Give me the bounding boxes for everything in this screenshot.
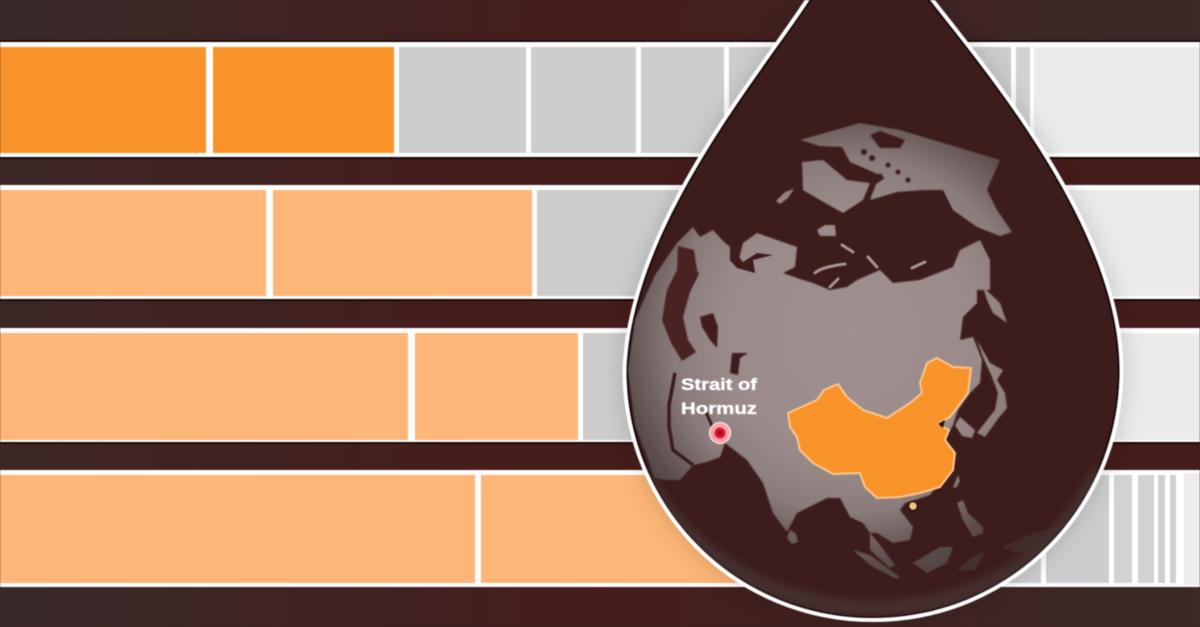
- globe map: [628, 123, 1100, 608]
- land masses: [628, 123, 1060, 579]
- bar row 2: [0, 190, 1200, 296]
- oil drop: [626, 0, 1120, 618]
- bohai sea notch: [938, 420, 945, 428]
- red sea: [669, 373, 693, 465]
- svalbard: [817, 225, 836, 236]
- arctic islands: [815, 245, 925, 287]
- china: [788, 358, 971, 498]
- philippines: [957, 500, 983, 537]
- borneo: [913, 547, 953, 573]
- black sea: [700, 313, 718, 348]
- bar row 1: [0, 47, 1200, 153]
- eurasia and africa: [628, 227, 990, 543]
- hainan: [908, 502, 918, 510]
- bar row 4: [0, 473, 1200, 585]
- new guinea and eastern islands: [1004, 531, 1044, 552]
- iceland: [776, 189, 794, 204]
- malay peninsula: [870, 533, 895, 568]
- north america: [800, 123, 1012, 236]
- greenland: [802, 160, 870, 213]
- strait of hormuz label: Hormuz: [681, 399, 757, 418]
- taiwan: [953, 475, 960, 488]
- sumatra: [853, 550, 900, 579]
- drop shadow: [626, 0, 1120, 618]
- globe rim shading: [640, 470, 1100, 608]
- sakhalin: [983, 287, 1007, 323]
- canadian archipelago water: [861, 131, 910, 182]
- korea: [955, 417, 975, 438]
- strait of hormuz marker: [710, 422, 730, 444]
- strait of hormuz label: Strait of: [681, 375, 757, 394]
- persian gulf: [705, 410, 713, 428]
- baltic sea: [730, 252, 773, 274]
- sri lanka: [787, 530, 798, 544]
- caspian sea: [730, 353, 748, 375]
- bar row 3: [0, 333, 1200, 440]
- strait of hormuz label: [681, 375, 757, 418]
- mediterranean sea: [662, 246, 699, 361]
- japan: [977, 340, 1007, 437]
